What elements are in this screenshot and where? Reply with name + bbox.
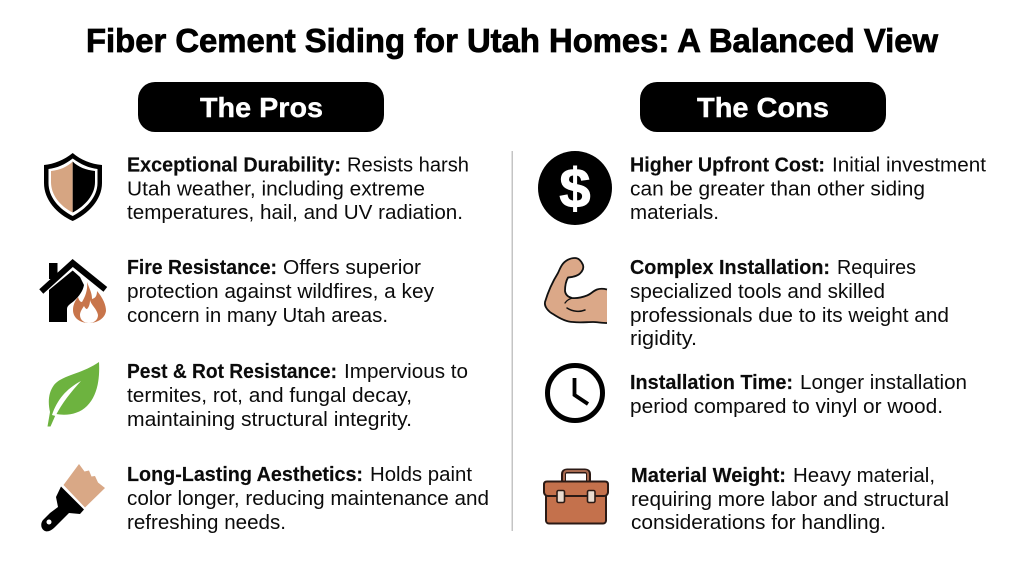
text: pest and rot resistance: maintaining structural integrity.	[127, 409, 412, 431]
text: installation time	[630, 372, 967, 418]
text: material weight	[631, 465, 949, 534]
text: fire resistance: Offers superior	[283, 257, 421, 279]
heading: the pros: The Pros	[200, 92, 323, 123]
text: fire resistance	[127, 257, 434, 327]
text: complex installation	[630, 257, 949, 350]
icon: paint brush	[41, 464, 105, 531]
text: exceptional durability: Resists harsh	[347, 154, 469, 176]
text: fire resistance: Fire Resistance:	[127, 257, 277, 279]
icon: toolbox	[544, 471, 608, 524]
icon: leaf	[48, 362, 99, 426]
heading: the cons: The Cons	[697, 92, 829, 123]
text: installation time: period compared to vinyl or wood.	[630, 396, 943, 418]
text: complex installation: Requires	[837, 257, 916, 279]
icon: dollar coin	[538, 151, 612, 225]
text: exceptional durability: temperatures, hail, and UV radiation.	[127, 202, 463, 224]
item: exceptional durability	[44, 153, 469, 224]
text: long-lasting aesthetics: Long-Lasting Aesthetics:	[127, 464, 363, 486]
text: pest and rot resistance: termites, rot, and fungal decay,	[127, 385, 412, 407]
heading: the cons	[640, 82, 886, 132]
text: exceptional durability: Exceptional Durability:	[127, 154, 341, 176]
text: long-lasting aesthetics: color longer, reducing maintenance and	[127, 488, 489, 510]
icon: shield	[44, 153, 102, 221]
text: long-lasting aesthetics: Holds paint	[370, 464, 472, 486]
panel: the cons	[538, 82, 986, 534]
text: complex installation: specialized tools and skilled	[630, 281, 885, 303]
text: material weight: Material Weight:	[631, 465, 786, 487]
text: installation time: Installation Time:	[630, 372, 793, 394]
text: long-lasting aesthetics	[127, 464, 489, 534]
text: complex installation: professionals due to its weight and	[630, 305, 949, 327]
panel: the pros	[41, 82, 489, 534]
text: higher upfront cost	[630, 154, 986, 224]
item: pest and rot resistance	[48, 361, 468, 431]
text: higher upfront cost: Higher Upfront Cost:	[630, 154, 825, 176]
icon: clock	[548, 366, 602, 420]
text: pest and rot resistance: Impervious to	[344, 361, 468, 383]
heading: the pros	[138, 82, 384, 132]
text: material weight: Heavy material,	[793, 465, 935, 487]
text: higher upfront cost: can be greater than other siding	[630, 178, 925, 200]
text: fire resistance: protection against wildfires, a key	[127, 281, 434, 303]
text: exceptional durability: Utah weather, including extreme	[127, 178, 425, 200]
text: long-lasting aesthetics: refreshing needs.	[127, 512, 286, 534]
item: fire resistance	[44, 257, 434, 327]
text: installation time: Longer installation	[800, 372, 967, 394]
icon: dollar coin: $	[559, 156, 591, 220]
title: Fiber Cement Siding for Utah Homes: A Balanced View	[86, 23, 939, 60]
icon: flexed arm	[545, 258, 607, 323]
item: higher upfront cost	[538, 151, 986, 225]
text: pest and rot resistance: Pest & Rot Resistance:	[127, 361, 337, 383]
item: long-lasting aesthetics	[41, 464, 489, 534]
text: material weight: considerations for handling.	[631, 512, 886, 534]
text: material weight: requiring more labor and structural	[631, 489, 949, 511]
item: complex installation	[545, 257, 949, 350]
item: installation time	[548, 366, 967, 420]
icon: house with flame	[44, 263, 106, 323]
text: pest and rot resistance	[127, 361, 468, 431]
text: higher upfront cost: Initial investment	[832, 154, 986, 176]
text: exceptional durability	[127, 154, 469, 224]
text: complex installation: rigidity.	[630, 328, 697, 350]
item: material weight	[544, 465, 949, 534]
text: complex installation: Complex Installation:	[630, 257, 830, 279]
text: fire resistance: concern in many Utah areas.	[127, 305, 388, 327]
text: higher upfront cost: materials.	[630, 202, 719, 224]
